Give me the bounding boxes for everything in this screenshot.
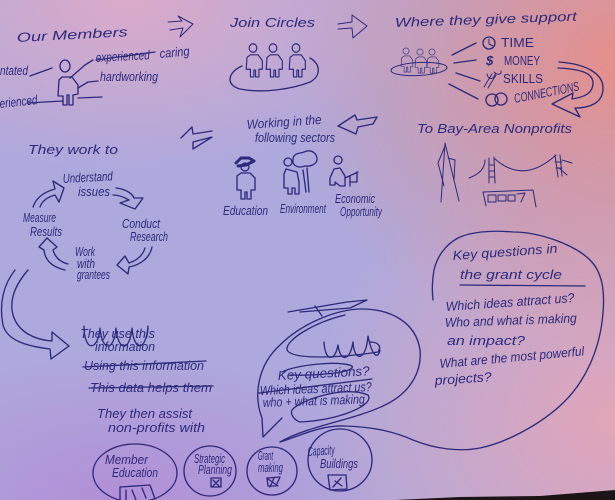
attribute: hardworking: hardworking <box>100 69 159 84</box>
abandoned text: this data helps them: This data helps them <box>90 380 212 395</box>
callout heading <box>452 241 585 286</box>
circle group giving support <box>391 48 447 77</box>
icon: transamerica tower <box>438 143 459 202</box>
callout: key questions in the grant cycle <box>280 231 604 450</box>
arrow: grantees to results <box>39 238 68 270</box>
abandoned text: they use this with scribble: information <box>95 339 155 354</box>
service: grant making: making <box>258 460 283 475</box>
text: they then assist non-profits with <box>97 406 205 435</box>
service: capacity building: Capacity <box>307 442 336 459</box>
attribute: caring: caring <box>159 43 191 61</box>
attribute: left cut-off top: ntated <box>0 63 29 78</box>
cycle diagram <box>23 168 168 282</box>
label: economic opportunity: Economic <box>335 191 375 206</box>
support: connections: CONNECTIONS <box>513 79 581 106</box>
support: connections <box>486 79 581 106</box>
callout questions: Who and what is making <box>445 310 578 330</box>
cycle step: conduct research: Research <box>130 229 168 244</box>
icon: economic figure at desk <box>330 156 358 186</box>
heading: they work to: They work to <box>28 142 118 157</box>
heading: where they give support: Where they give support <box>395 9 579 30</box>
cycle step: work with grantees: grantees <box>77 267 110 282</box>
sector: economic opportunity <box>330 156 383 219</box>
text: they then assist non-profits with: They then assist <box>97 406 193 421</box>
support: money <box>485 53 540 68</box>
heading: our members: Our Members <box>16 24 129 45</box>
scribble strokes <box>282 300 380 422</box>
arrow: issues to research <box>113 188 143 209</box>
attribute: experienced struck through: experienced <box>95 47 151 65</box>
crossed draft text: Key questions? <box>277 363 371 383</box>
support: time: TIME <box>501 35 534 50</box>
service: member education: Member <box>105 452 149 467</box>
arrow: cycle down to information <box>2 270 69 359</box>
support: skills <box>484 71 543 88</box>
service: grant making: Grant <box>258 448 274 463</box>
cycle step: measure results <box>23 210 62 239</box>
sector: environment <box>280 151 327 216</box>
crossed draft text: who + what is making <box>263 391 366 410</box>
crossed draft text <box>259 363 373 410</box>
support: money: $ <box>485 53 494 68</box>
heading: join circles: Join Circles <box>229 15 316 30</box>
abandoned speech bubble with scribbles <box>258 300 420 442</box>
support: time <box>483 35 534 50</box>
icon: building row <box>483 190 536 207</box>
label: economic opportunity <box>335 191 383 219</box>
abandoned text: using this information: Using this information <box>84 358 204 373</box>
arrow: back to sectors <box>338 115 377 134</box>
service: grant making <box>247 447 297 495</box>
icon: member figure <box>58 60 78 105</box>
service: member education: Education <box>112 465 158 480</box>
support: skills: SKILLS <box>503 71 543 86</box>
heading: working in the following sectors <box>246 112 335 145</box>
callout heading: Key questions in <box>452 241 558 263</box>
callout questions <box>433 290 586 388</box>
icon: golden gate bridge <box>469 155 572 183</box>
icon: environment figure and tree <box>284 151 317 194</box>
label: education: Education <box>223 203 268 218</box>
icon: education figure <box>236 158 255 199</box>
arrow: circles to support <box>338 15 367 38</box>
service: capacity building <box>307 429 372 491</box>
service: strategic planning: Strategic <box>194 451 225 466</box>
cycle step: understand issues: Understand <box>62 168 114 186</box>
cycle step: understand issues <box>62 168 114 199</box>
member figure with attributes <box>0 43 191 111</box>
cycle step: work with grantees <box>75 244 110 282</box>
arrow: results to issues <box>33 181 64 207</box>
callout questions: projects? <box>433 369 493 388</box>
connector lines <box>27 60 102 103</box>
cycle step: measure results: Results <box>30 224 62 239</box>
attribute: experienced struck left: erienced <box>0 92 39 111</box>
cycle step: work with grantees: Work <box>75 244 96 259</box>
arrow: members to circles <box>168 16 193 37</box>
service: strategic planning: Planning <box>198 462 233 477</box>
callout questions: Which ideas attract us? <box>445 290 576 314</box>
arrow: sectors to work cycle <box>181 127 212 149</box>
callout heading: the grant cycle <box>460 267 562 282</box>
abandoned text: they use this with scribble: They use this <box>80 326 155 341</box>
arrow: research to grantees <box>117 247 152 274</box>
support connector lines <box>449 43 480 99</box>
sector: education <box>223 158 268 218</box>
heading: working in the following sectors: following sectors <box>255 130 335 145</box>
join circles group <box>230 44 318 91</box>
service: member education <box>93 444 177 500</box>
service: capacity building: Buildings <box>320 456 358 471</box>
label: environment: Environment <box>280 201 327 216</box>
callout questions: What are the most powerful <box>439 343 586 371</box>
cycle step: understand issues: issues <box>78 184 110 199</box>
text: they then assist non-profits with: non-profits with <box>108 420 205 435</box>
cycle step: conduct research <box>122 216 168 244</box>
crossed draft text: Which ideas attract us? <box>260 379 373 398</box>
abandoned text: they use this with scribble <box>80 326 155 354</box>
arrow: curved to nonprofits <box>552 62 603 117</box>
label: economic opportunity: Opportunity <box>340 204 383 219</box>
cycle step: conduct research: Conduct <box>122 216 161 231</box>
callout questions: an impact? <box>447 333 526 348</box>
service: strategic planning <box>184 446 236 496</box>
heading: to bay-area nonprofits: To Bay-Area Nonprofits <box>417 121 573 136</box>
heading: working in the following sectors: Working in the <box>246 112 322 132</box>
cycle step: work with grantees: with <box>77 256 95 271</box>
cycle step: measure results: Measure <box>23 210 56 225</box>
table edge at bottom right <box>395 490 615 500</box>
support: money: MONEY <box>504 53 540 68</box>
